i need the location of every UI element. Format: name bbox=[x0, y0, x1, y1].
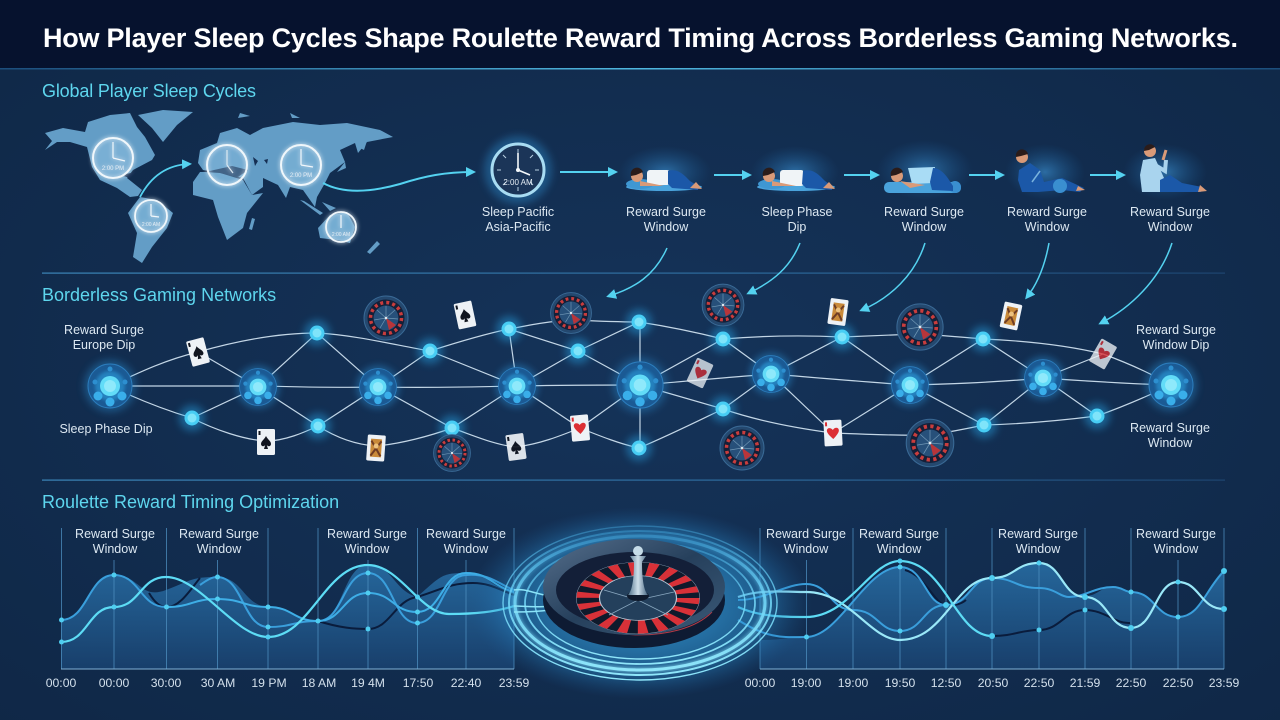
time axis bbox=[745, 676, 1239, 690]
arrow: map to main clock bbox=[323, 172, 473, 191]
sleeper 3 bbox=[877, 140, 973, 200]
blue series bbox=[738, 571, 1224, 631]
number ring bbox=[576, 562, 700, 634]
sleep stage labels: Reward Surge bbox=[1130, 205, 1210, 219]
time axis: 19 4M bbox=[351, 676, 385, 690]
clock: Australia bbox=[326, 212, 356, 242]
network labels: Sleep Phase Dip bbox=[59, 422, 153, 436]
spindle bbox=[627, 546, 649, 601]
time axis: 17:50 bbox=[403, 676, 433, 690]
main clock bbox=[484, 136, 552, 204]
arrow bbox=[560, 171, 615, 173]
window labels bbox=[766, 527, 1216, 556]
section divider bbox=[42, 272, 1225, 274]
sleeper 2 bbox=[751, 146, 839, 198]
curve ends into wheel bbox=[514, 590, 550, 612]
network labels: Reward Surge bbox=[64, 323, 144, 337]
sleep stage labels: Reward Surge bbox=[1007, 205, 1087, 219]
heading: timing: Roulette Reward Timing Optimization bbox=[42, 492, 339, 512]
window labels: Window bbox=[784, 542, 829, 556]
hub nodes bbox=[84, 352, 1197, 412]
blue series bbox=[61, 573, 514, 627]
sleep stage labels: Dip bbox=[788, 220, 806, 234]
sleeper 1 bbox=[619, 146, 711, 198]
sleep stage labels: Window bbox=[902, 220, 947, 234]
arrow bbox=[969, 174, 1002, 176]
mid series bbox=[166, 573, 514, 621]
label: sleep pacific: Sleep Pacific bbox=[482, 205, 554, 219]
time axis: 19 PM bbox=[251, 676, 287, 690]
glow halo bbox=[468, 507, 812, 699]
window labels: Reward Surge bbox=[859, 527, 939, 541]
heading: networks: Borderless Gaming Networks bbox=[42, 285, 276, 305]
window labels: Reward Surge bbox=[327, 527, 407, 541]
wheel base bbox=[543, 552, 725, 648]
time axis: 22:50 bbox=[1116, 676, 1146, 690]
window labels: Reward Surge bbox=[766, 527, 846, 541]
map flow arrow: Americas to Europe bbox=[140, 164, 189, 197]
small nodes bbox=[179, 309, 1110, 461]
window labels: Reward Surge bbox=[179, 527, 259, 541]
time axis: 19:00 bbox=[838, 676, 868, 690]
sleep stage labels: Reward Surge bbox=[626, 205, 706, 219]
network labels: Window bbox=[1148, 436, 1193, 450]
window labels: Reward Surge bbox=[1136, 527, 1216, 541]
roulette wheel with glow rings bbox=[468, 507, 812, 699]
window labels: Reward Surge bbox=[75, 527, 155, 541]
cyan series bbox=[738, 561, 992, 636]
wheel bowl bbox=[556, 552, 714, 628]
time axis: 18 AM bbox=[302, 676, 336, 690]
arrow bbox=[714, 174, 749, 176]
right timing chart bbox=[738, 527, 1239, 690]
network labels: Reward Surge bbox=[1136, 323, 1216, 337]
clock: Australia: 2:00 AM bbox=[332, 232, 350, 238]
time axis: 23:59 bbox=[1209, 676, 1239, 690]
grid lines bbox=[760, 528, 1224, 669]
title bar bbox=[0, 0, 1280, 70]
label: sleep pacific: Asia-Pacific bbox=[485, 220, 551, 234]
clock: South America bbox=[135, 200, 167, 232]
time axis: 22:40 bbox=[451, 676, 481, 690]
window labels: Reward Surge bbox=[426, 527, 506, 541]
time axis: 21:59 bbox=[1070, 676, 1100, 690]
grid lines bbox=[61, 528, 514, 669]
playing cards bbox=[186, 298, 1117, 462]
left timing chart bbox=[46, 527, 529, 690]
area fill bbox=[760, 563, 1224, 669]
time axis: 00:00 bbox=[99, 676, 129, 690]
network graph bbox=[84, 284, 1197, 471]
time axis: 23:59 bbox=[499, 676, 529, 690]
arrow bbox=[844, 174, 877, 176]
clock: South America: 2:00 AM bbox=[142, 222, 160, 228]
area fill bbox=[61, 565, 514, 669]
time axis: 19:50 bbox=[885, 676, 915, 690]
clock: Asia bbox=[281, 145, 321, 185]
title: How Player Sleep Cycles Shape Roulette Reward Timing Across Borderless Gaming Networks. bbox=[43, 23, 1238, 53]
sleep stage labels bbox=[626, 205, 1210, 234]
section divider bbox=[42, 480, 1225, 481]
time axis: 00:00 bbox=[46, 676, 76, 690]
network links bbox=[110, 320, 1171, 448]
window labels: Window bbox=[1016, 542, 1061, 556]
time axis: 22:50 bbox=[1024, 676, 1054, 690]
wheel rim bbox=[543, 539, 725, 635]
sleep stage labels: Window bbox=[644, 220, 689, 234]
network labels: Window Dip bbox=[1143, 338, 1209, 352]
arrow bbox=[1090, 174, 1123, 176]
time axis: 19:00 bbox=[791, 676, 821, 690]
window labels: Window bbox=[93, 542, 138, 556]
window labels: Window bbox=[345, 542, 390, 556]
bright series bbox=[61, 565, 514, 642]
time axis: 22:50 bbox=[1163, 676, 1193, 690]
sleep stage labels: Window bbox=[1148, 220, 1193, 234]
heading: global sleep cycles: Global Player Sleep Cycles bbox=[42, 81, 256, 101]
reclining person bbox=[1005, 144, 1085, 200]
clock: Europe bbox=[207, 145, 247, 185]
network labels: Europe Dip bbox=[73, 338, 135, 352]
window labels: Window bbox=[877, 542, 922, 556]
main clock: 2:00 AM bbox=[503, 178, 533, 187]
window labels: Window bbox=[1154, 542, 1199, 556]
window labels: Window bbox=[444, 542, 489, 556]
sleep stage labels: Window bbox=[1025, 220, 1070, 234]
time axis: 30 AM bbox=[201, 676, 235, 690]
data points bbox=[59, 570, 420, 644]
time axis: 00:00 bbox=[745, 676, 775, 690]
map detail: Mediterranean and inland seas bbox=[120, 157, 268, 178]
spokes bbox=[604, 590, 674, 615]
sitting person bbox=[1123, 144, 1207, 200]
world map bbox=[45, 110, 393, 263]
time axis: 30:00 bbox=[151, 676, 181, 690]
clock: North America: 2:00 PM bbox=[102, 166, 124, 172]
network labels bbox=[59, 323, 1216, 450]
energy rings bbox=[503, 526, 777, 680]
blue filled edge bbox=[738, 567, 946, 637]
time axis: 20:50 bbox=[978, 676, 1008, 690]
window labels: Window bbox=[197, 542, 242, 556]
data points bbox=[804, 558, 1227, 640]
clock: Asia: 2:00 PM bbox=[290, 173, 312, 179]
sleep stage labels: Reward Surge bbox=[884, 205, 964, 219]
sleep stage labels: Sleep Phase bbox=[762, 205, 832, 219]
time axis bbox=[46, 676, 529, 690]
down arrows to network bbox=[609, 243, 1172, 323]
window labels: Reward Surge bbox=[998, 527, 1078, 541]
clock: North America bbox=[93, 138, 133, 178]
roulette icons bbox=[364, 284, 954, 471]
dark series bbox=[905, 570, 1130, 636]
window labels bbox=[75, 527, 506, 556]
bright series bbox=[738, 563, 1224, 640]
wheel hub bbox=[600, 576, 676, 620]
time axis: 12:50 bbox=[931, 676, 961, 690]
dark series bbox=[149, 578, 514, 629]
network labels: Reward Surge bbox=[1130, 421, 1210, 435]
